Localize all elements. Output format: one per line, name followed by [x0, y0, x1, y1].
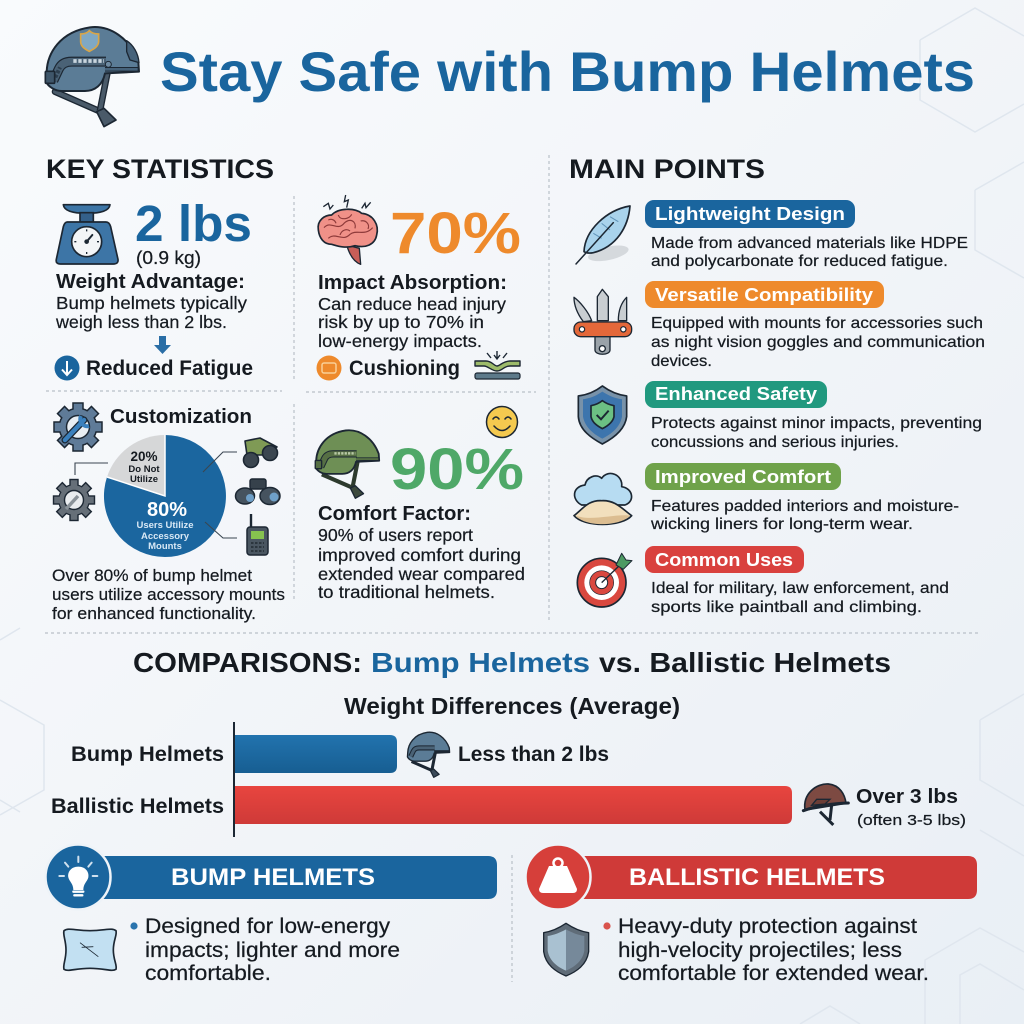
icon: feather — [576, 206, 630, 264]
point: common uses: sports like paintball and climbing. — [651, 599, 922, 616]
pie chart: accessory mount use: Accessory — [141, 531, 190, 542]
stat: weight advantage: (0.9 kg) — [136, 248, 201, 268]
icon: shield with check — [578, 386, 627, 444]
icon: target — [577, 553, 632, 607]
bar chart: weight differences — [51, 693, 966, 837]
pie chart: accessory mount use: Mounts — [148, 541, 182, 552]
stat: weight advantage: Reduced Fatigue — [86, 357, 253, 380]
section divider — [45, 632, 980, 634]
point: versatile compatibility: as night vision goggles and communication — [651, 334, 985, 351]
stat: impact absorption: Impact Absorption: — [318, 272, 507, 294]
stat: customization: users utilize accessory mounts — [52, 585, 285, 604]
icon: gear and wrench — [54, 403, 102, 451]
bar chart: weight differences: Less than 2 lbs — [458, 743, 609, 766]
point: enhanced safety: concussions and serious injuries. — [651, 434, 899, 451]
icon: pillow — [64, 929, 116, 970]
pie chart: accessory mount use: Utilize — [130, 474, 158, 485]
point: lightweight design: Lightweight Design — [655, 204, 845, 224]
arrow — [154, 336, 171, 354]
bullet text: comfortable for extended wear. — [618, 962, 929, 985]
point: enhanced safety: Protects against minor impacts, preventing — [651, 415, 982, 432]
stat: comfort factor: 90% — [390, 437, 524, 502]
bullet text — [603, 915, 929, 985]
icon: weight — [539, 858, 577, 893]
banner: bump helmets — [46, 844, 497, 910]
header icon: bump helmet — [45, 27, 139, 127]
stat: impact absorption — [316, 195, 521, 380]
panel: ballistic helmets — [526, 844, 977, 985]
banner: ballistic helmets — [526, 844, 977, 910]
point: lightweight design — [576, 200, 968, 270]
stat: comfort factor: extended wear compared — [318, 564, 525, 584]
panel: comparisons — [51, 647, 966, 837]
stat: customization: Customization — [110, 406, 252, 428]
bullet text: Designed for low-energy — [145, 915, 391, 938]
icon: green binoculars — [244, 438, 278, 468]
icon: compressed cushion — [475, 351, 520, 379]
panel: main points — [569, 154, 985, 616]
bullet text: comfortable. — [145, 962, 271, 985]
stat: impact absorption: Can reduce head injury — [318, 294, 506, 314]
point: enhanced safety — [578, 381, 982, 451]
heading: comparisons: vs. Ballistic Helmets — [599, 647, 891, 678]
bullet text — [130, 915, 400, 985]
point: improved comfort: wicking liners for long-term wear. — [650, 516, 913, 533]
icon: cloud and pillow — [574, 473, 632, 524]
pie chart: accessory mount use: 20% — [130, 449, 158, 464]
stat: impact absorption: 70% — [390, 201, 521, 266]
bar chart: weight differences: Over 3 lbs — [856, 786, 958, 808]
point: versatile compatibility: Versatile Compatibility — [655, 285, 873, 305]
point: common uses: Ideal for military, law enforcement, and — [651, 580, 949, 597]
pie chart: accessory mount use: Users Utilize — [136, 520, 194, 531]
panel: key statistics — [46, 154, 549, 623]
icon: smiley — [486, 406, 518, 438]
icon: green helmet — [315, 430, 379, 498]
heading: comparisons — [133, 647, 891, 678]
point: improved comfort: Features padded interiors and moisture- — [651, 498, 959, 515]
icon: gear small — [54, 480, 94, 520]
stat: comfort factor: improved comfort during — [318, 545, 521, 565]
bar chart: weight differences: Ballistic Helmets — [51, 795, 224, 818]
icon: night vision goggles — [236, 479, 280, 504]
point: improved comfort: Improved Comfort — [655, 467, 831, 487]
bar chart: weight differences: Bump Helmets — [71, 743, 224, 766]
point: improved comfort — [574, 463, 959, 533]
pie chart: accessory mount use — [104, 435, 226, 557]
bar chart: weight differences: (often 3-5 lbs) — [857, 812, 966, 829]
icon: cushioning badge — [316, 356, 342, 380]
icon: ballistic helmet — [803, 784, 848, 825]
stat: comfort factor: to traditional helmets. — [318, 582, 495, 602]
icon: multi-tool — [574, 289, 632, 354]
leader lines — [75, 452, 237, 538]
point: lightweight design: and polycarbonate for reduced fatigue. — [651, 253, 948, 270]
heading: key statistics: KEY STATISTICS — [46, 154, 274, 184]
bullet text: impacts; lighter and more — [145, 939, 400, 962]
stat: weight advantage: Bump helmets typically — [56, 293, 247, 313]
icon: scale — [56, 205, 118, 264]
heading: comparisons: COMPARISONS: — [133, 647, 362, 678]
icon: brain — [318, 195, 377, 264]
bullet text: high-velocity projectiles; less — [618, 939, 902, 962]
bullet text: Heavy-duty protection against — [618, 915, 917, 938]
stat: customization: for enhanced functionality. — [52, 604, 256, 623]
pie chart: accessory mount use: Do Not — [128, 464, 160, 475]
icon: small bump helmet — [407, 732, 450, 777]
bar chart: weight differences: Weight Differences (Average) — [344, 693, 680, 719]
stat: weight advantage: weigh less than 2 lbs. — [55, 312, 227, 332]
stat: impact absorption: Cushioning — [349, 357, 460, 380]
point: common uses — [577, 546, 949, 616]
point: lightweight design: Made from advanced materials like HDPE — [651, 235, 968, 252]
divider lines — [46, 155, 549, 622]
heading: main points: MAIN POINTS — [569, 154, 765, 184]
stat: comfort factor: Comfort Factor: — [318, 503, 471, 525]
banner: ballistic helmets: BALLISTIC HELMETS — [629, 864, 885, 891]
stat: impact absorption: low-energy impacts. — [318, 331, 482, 351]
title: Stay Safe with Bump Helmets — [160, 40, 975, 103]
stat: customization — [52, 403, 285, 623]
point: enhanced safety: Enhanced Safety — [655, 384, 817, 404]
icon: down circle — [54, 356, 80, 380]
stat: weight advantage: Weight Advantage: — [56, 271, 245, 293]
stat: impact absorption: risk by up to 70% in — [318, 312, 484, 332]
point: versatile compatibility — [574, 281, 985, 370]
stat: customization: Over 80% of bump helmet — [52, 566, 252, 585]
heading: comparisons: Bump Helmets — [371, 647, 590, 678]
point: versatile compatibility: Equipped with mounts for accessories such — [651, 315, 983, 332]
icon: radio — [247, 514, 268, 555]
bottom divider — [511, 855, 513, 982]
stat: weight advantage — [54, 195, 253, 380]
point: versatile compatibility: devices. — [651, 353, 712, 370]
panel: bump helmets — [46, 844, 497, 985]
point: common uses: Common Uses — [655, 550, 793, 570]
icon: light bulb — [59, 857, 97, 895]
pie chart: accessory mount use: 80% — [147, 499, 187, 521]
stat: weight advantage: 2 lbs — [135, 195, 252, 252]
banner: bump helmets: BUMP HELMETS — [171, 864, 375, 891]
icon: gray shield — [544, 923, 589, 976]
stat: comfort factor: 90% of users report — [318, 525, 473, 545]
stat: comfort factor — [315, 406, 525, 602]
